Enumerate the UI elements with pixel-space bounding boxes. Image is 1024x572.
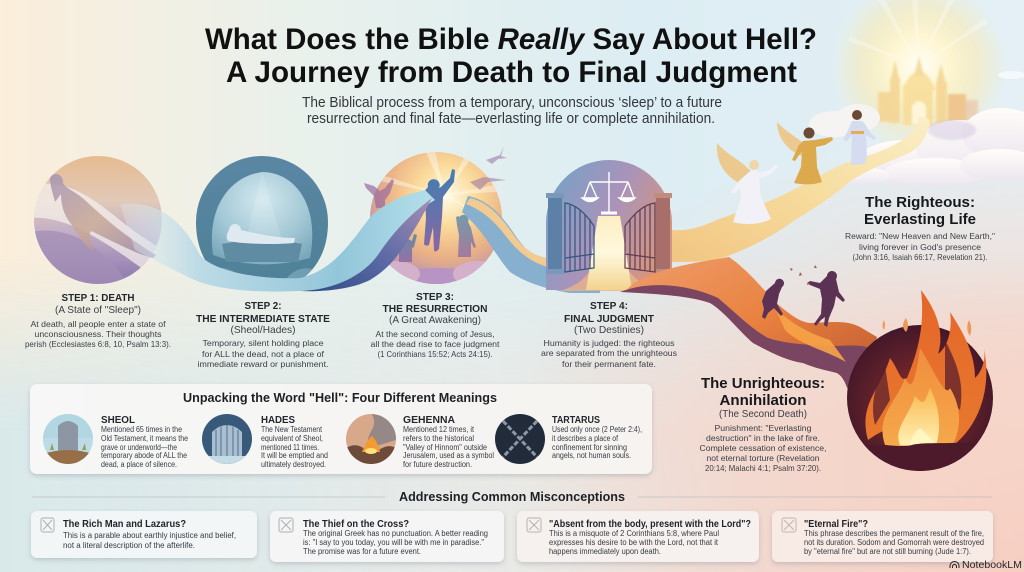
gehenna text: Jerusalem, used as a symbol — [403, 451, 494, 460]
sheol text: grave or underworld—the — [101, 443, 177, 452]
step 1 text: STEP 1: DEATH — [62, 292, 134, 304]
golden city — [878, 56, 978, 125]
the righteous text: (John 3:16, Isaiah 66:17, Revelation 21). — [852, 252, 988, 262]
step 4 text: are separated from the unrighteous — [541, 348, 677, 358]
golden path to heaven — [672, 116, 930, 262]
gates — [565, 203, 655, 272]
tartarus text: confinement for sinning — [552, 443, 627, 452]
step 3 text: At the second coming of Jesus, — [376, 329, 494, 339]
step 4 text: (Two Destinies) — [574, 324, 644, 336]
tartarus text: angels, not human souls. — [552, 451, 631, 460]
step 2 illustration: cave — [196, 156, 330, 290]
tartarus text: TARTARUS — [552, 414, 600, 426]
gehenna text: "Valley of Hinnom" outside — [403, 443, 487, 452]
the righteous text: Everlasting Life — [864, 211, 976, 228]
sleeping body — [50, 174, 156, 258]
subtitle: resurrection and final fate—everlasting life or complete annihilation. — [307, 111, 715, 127]
hades text: The New Testament — [261, 425, 323, 434]
sheol text: temporary abode of ALL the — [101, 451, 187, 460]
icon: gate of hades — [202, 414, 252, 466]
sheol text: Old Testament, it means the — [101, 434, 188, 443]
title: A Journey from Death to Final Judgment — [226, 56, 797, 89]
subtitle — [302, 95, 722, 127]
step 1 text: unconsciousness. Their thoughts — [34, 329, 162, 339]
step 4 text: STEP 4: — [590, 300, 628, 312]
the unrighteous text: not eternal torture (Revelation — [706, 453, 820, 463]
pillars — [546, 193, 672, 274]
figures: angel and the righteous — [717, 110, 876, 224]
sheol text: dead, a place of silence. — [101, 460, 177, 469]
the unrighteous text: (The Second Death) — [719, 408, 807, 420]
gehenna text — [403, 414, 494, 469]
the unrighteous text: destruction" in the lake of fire. — [706, 433, 820, 443]
card: rich man and lazarus — [31, 511, 257, 558]
step 2 text: (Sheol/Hades) — [230, 324, 296, 336]
step 2 text: THE INTERMEDIATE STATE — [196, 313, 330, 325]
scales of justice — [582, 172, 635, 213]
panel: four meanings of hell — [30, 384, 652, 474]
icon: burning valley — [346, 414, 396, 466]
icon: x box — [782, 518, 796, 532]
sheol text: SHEOL — [101, 414, 136, 426]
winged companion — [777, 122, 833, 184]
burning figure — [807, 271, 845, 327]
icon: gravestone — [43, 414, 93, 466]
step 4 text: FINAL JUDGMENT — [564, 313, 655, 325]
step 1 text: At death, all people enter a state of — [30, 319, 166, 329]
step 3 text: (A Great Awakening) — [389, 314, 481, 326]
robed figure — [843, 110, 876, 165]
card: eternal fire: not its duration. Sodom and Gomorrah were destroyed — [804, 538, 984, 547]
resting figure — [227, 224, 295, 244]
tartarus text: Used only once (2 Peter 2:4), — [552, 425, 642, 434]
card: thief on the cross: The original Greek has no punctuation. A better reading — [303, 529, 488, 538]
card: thief on the cross: is: "I say to you today, you will be with me in paradise." — [303, 538, 484, 547]
misconceptions heading: Addressing Common Misconceptions — [399, 489, 625, 504]
the righteous text: The Righteous: — [865, 194, 975, 211]
subtitle: The Biblical process from a temporary, unconscious ‘sleep’ to a future — [302, 95, 722, 111]
card: rich man and lazarus: not a literal description of the afterlife. — [63, 541, 195, 550]
step 2 text: Temporary, silent holding place — [202, 338, 324, 348]
card: absent from the body: "Absent from the body, present with the Lord"? — [549, 518, 751, 530]
clouds — [809, 71, 1024, 186]
card: eternal fire: by "eternal fire" but are not still burning (Jude 1:7). — [804, 547, 971, 556]
fire path — [620, 257, 877, 393]
card: eternal fire: "Eternal Fire"? — [804, 518, 868, 530]
the righteous text: living forever in God's presence — [859, 242, 981, 252]
step 1 text: perish (Ecclesiastes 6:8, 10, Psalm 13:3). — [25, 339, 171, 349]
hades text: mentioned 11 times. — [261, 443, 319, 452]
icon: crossed chains — [495, 414, 545, 464]
gehenna text: refers to the historical — [403, 434, 474, 443]
step 2 text: for ALL the dead, not a place of — [202, 349, 325, 359]
card: rich man and lazarus: The Rich Man and Lazarus? — [63, 518, 186, 530]
hades text: equivalent of Sheol, — [261, 434, 323, 443]
step 4 text — [541, 300, 677, 369]
falling figure — [762, 279, 784, 319]
card: absent from the body — [517, 511, 759, 562]
shaded lower edge — [620, 285, 875, 393]
step 1 text — [25, 292, 171, 349]
river ribbon linking steps — [120, 190, 435, 292]
fire pit — [847, 290, 993, 475]
gehenna text: GEHENNA — [403, 414, 455, 426]
step 3 text: STEP 3: — [416, 291, 454, 303]
the righteous text — [845, 194, 995, 262]
card: absent from the body: This is a misquote of 2 Corinthians 5:8, where Paul — [549, 529, 719, 538]
step 3 text — [370, 291, 500, 359]
sheol text: Mentioned 65 times in the — [101, 425, 182, 434]
step 1 illustration: sleeping figure — [30, 156, 170, 285]
the unrighteous text: Annihilation — [720, 392, 806, 409]
icon: x box — [41, 518, 54, 532]
step 3 illustration: resurrection — [364, 146, 507, 284]
card: rich man and lazarus: This is a parable about earthly injustice and belief, — [63, 531, 236, 540]
step 1 text: (A State of "Sleep") — [55, 304, 141, 316]
tartarus text — [552, 414, 642, 460]
icon: x box — [279, 518, 293, 532]
gehenna text: Mentioned 12 times, it — [403, 425, 475, 434]
card: absent from the body: expresses his desire to be with the Lord, not that it — [549, 538, 719, 547]
step 3 text: (1 Corinthians 15:52; Acts 24:15). — [378, 349, 492, 359]
step 2 text: STEP 2: — [244, 300, 282, 312]
step 4 illustration: scales and gates — [546, 160, 672, 291]
light beam — [586, 216, 632, 290]
hades text: It will be emptied and — [261, 451, 328, 460]
step 4 text: Humanity is judged: the righteous — [544, 338, 674, 348]
step 2 text — [196, 300, 330, 369]
card: thief on the cross: The Thief on the Cross? — [303, 518, 409, 530]
step 2 text: immediate reward or punishment. — [198, 359, 328, 369]
the unrighteous text: The Unrighteous: — [701, 375, 825, 392]
title — [205, 23, 817, 89]
hades text: HADES — [261, 414, 295, 426]
card: eternal fire: This phrase describes the permanent result of the fire, — [804, 529, 984, 538]
sun glow — [831, 0, 1007, 154]
step 4 text: for their permanent fate. — [562, 359, 656, 369]
hades text — [261, 414, 328, 469]
hades text: ultimately destroyed. — [261, 460, 326, 469]
angel — [717, 143, 778, 224]
the unrighteous text: Punishment: "Everlasting — [714, 423, 812, 433]
icon: x box — [527, 518, 541, 532]
the unrighteous text — [700, 375, 826, 473]
rising figures — [394, 169, 476, 262]
card: thief on the cross — [270, 511, 504, 562]
sheol text — [101, 414, 188, 469]
card: thief on the cross: The promise was for a future event. — [303, 547, 421, 556]
the righteous text: Reward: "New Heaven and New Earth," — [845, 231, 995, 241]
card: eternal fire — [772, 511, 993, 562]
step 3 text: THE RESURRECTION — [382, 303, 488, 315]
ribbon to judgment gate — [462, 196, 600, 293]
tartarus text: it describes a place of — [552, 434, 619, 443]
illustration: heavenly city with sun and clouds — [809, 0, 1024, 186]
the unrighteous text: Complete cessation of existence, — [700, 443, 826, 453]
notebooklm badge: NotebookLM — [962, 560, 1022, 571]
the unrighteous text: 20:14; Malachi 4:1; Psalm 37:20). — [705, 463, 821, 473]
title: What Does the Bible Really Say About Hell? — [205, 23, 817, 56]
card: absent from the body: happens immediately upon death. — [549, 547, 661, 556]
panel heading: Unpacking the Word "Hell": Four Different Meanings — [183, 390, 497, 405]
gehenna text: for future destruction. — [403, 460, 472, 469]
figures: the unrighteous — [762, 265, 845, 327]
step 3 text: all the dead rise to face judgment — [370, 339, 500, 349]
